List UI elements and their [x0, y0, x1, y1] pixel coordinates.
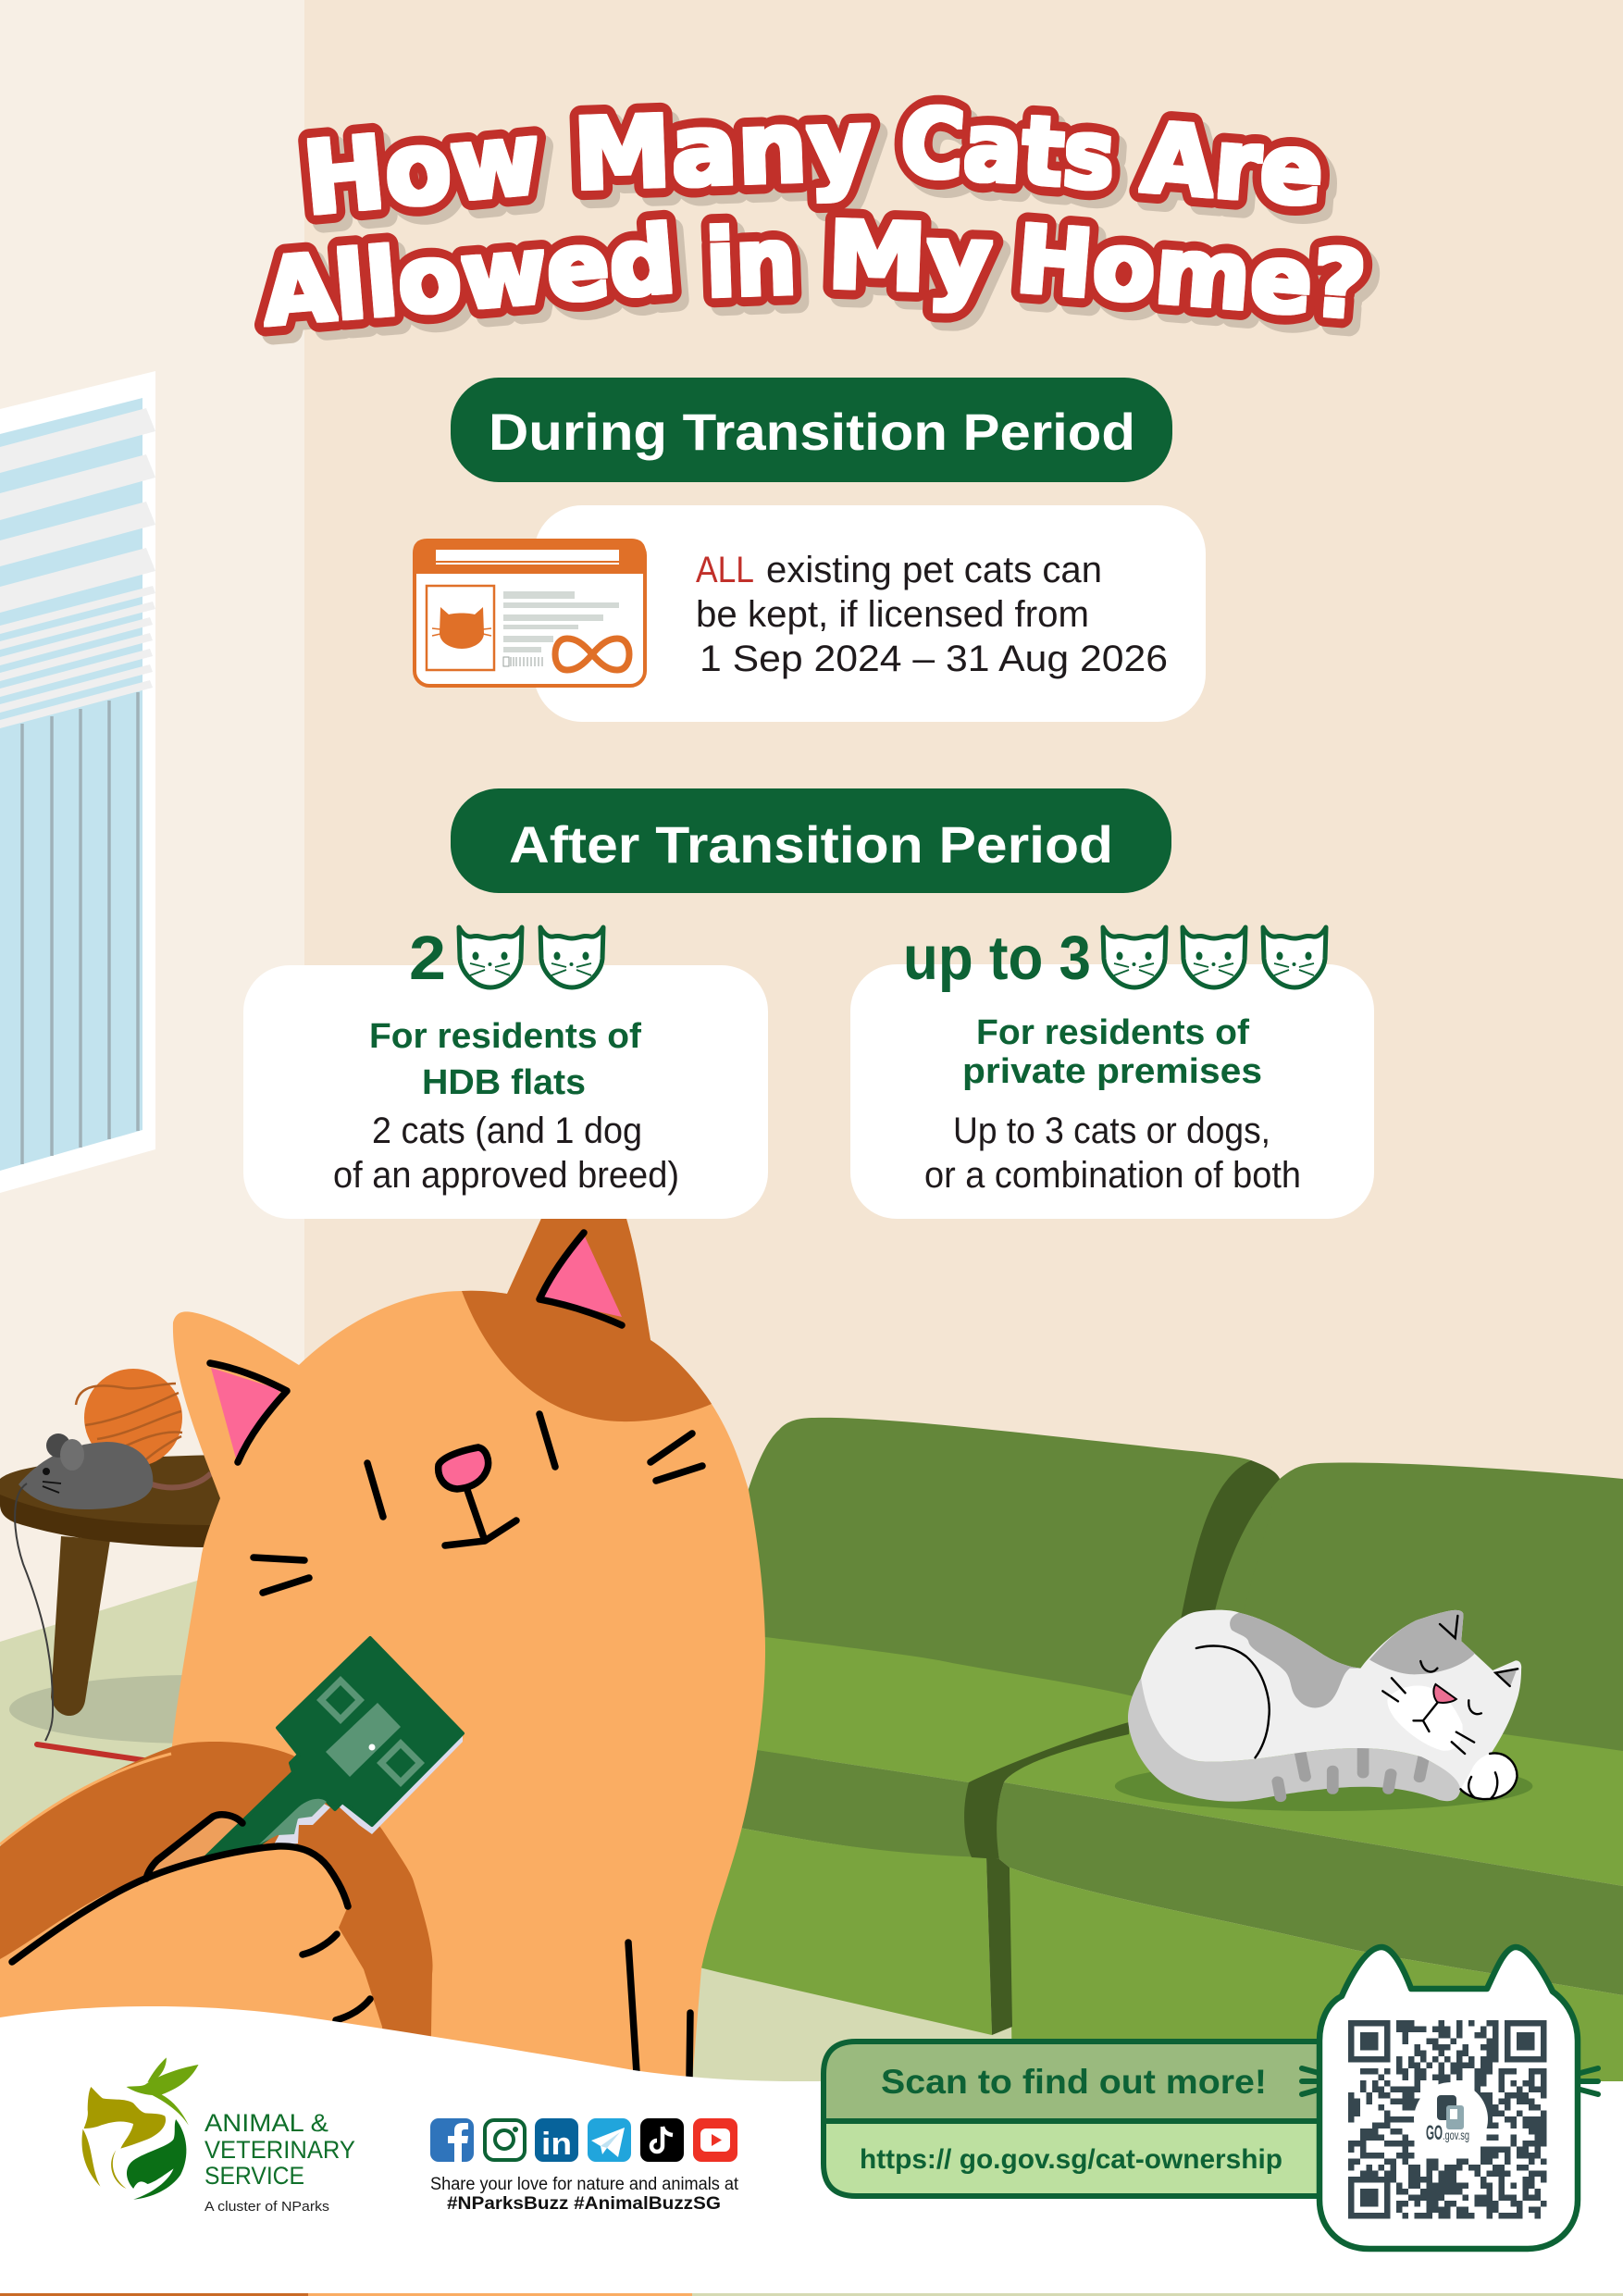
heading pill: during transition period — [451, 378, 1172, 482]
icon: ball of yarn — [76, 1369, 182, 1467]
key held by the cat — [205, 1638, 463, 1857]
title: How — [299, 101, 545, 238]
title: Cats — [897, 87, 1119, 212]
text: private premises allowance: or a combination of both — [924, 1155, 1301, 1196]
text: all existing pet cats: existing pet cats can — [766, 550, 1102, 590]
icon: toy mouse — [19, 1433, 211, 1509]
panel: during transition text box — [534, 505, 1206, 722]
tail and arm back — [0, 1742, 433, 2091]
social media icons — [430, 2118, 737, 2162]
count: 2: 2 — [409, 924, 446, 993]
logo text: SERVICE — [204, 2162, 304, 2190]
QR code in cat-shaped frame — [1302, 1947, 1598, 2249]
GO.gov.sg logo: GO — [1426, 2121, 1443, 2144]
white footer wave — [0, 2006, 1623, 2296]
text: share your love: Share your love for nature and animals at — [430, 2175, 739, 2194]
icon: cat face — [1263, 927, 1326, 987]
cat nose — [439, 1447, 489, 1489]
heading: for residents of private premises — [962, 1013, 1262, 1091]
cat frame — [1319, 1947, 1578, 2249]
heading: for residents of private premises: For residents of — [976, 1013, 1249, 1052]
icon: telegram — [588, 2118, 631, 2162]
title: Allowed — [258, 205, 679, 347]
window with blinds — [0, 371, 155, 1193]
panel: scan to find out more: Scan to find out more! — [881, 2063, 1267, 2101]
title: Are — [1138, 101, 1328, 228]
cat whiskers — [1302, 2068, 1598, 2094]
icon: cat face — [459, 927, 522, 987]
count: up to 3: up to 3 — [903, 924, 1091, 993]
text: all existing pet cats — [696, 550, 1168, 679]
panel: scan to find out more: https:// go.gov.sg/cat-ownership — [860, 2144, 1282, 2175]
heading: for residents of HDB flats — [369, 1017, 641, 1102]
icon: cat face — [1183, 927, 1245, 987]
cat head patch and ear — [462, 1212, 712, 1421]
logo mark — [81, 2057, 199, 2200]
title: My — [825, 201, 994, 315]
title: in — [704, 207, 799, 318]
title: Many — [572, 88, 873, 212]
sleeping white and grey cat — [1115, 1610, 1532, 1811]
cat ear inners — [211, 1235, 622, 1458]
cat body — [148, 1212, 765, 2128]
text: HDB allowance: of an approved breed) — [333, 1155, 679, 1196]
heading pill: after transition period — [451, 788, 1171, 893]
text: HDB allowance — [333, 1111, 679, 1196]
icon: cat face — [540, 927, 603, 987]
paw outlines — [12, 1815, 370, 2020]
logo text: A cluster of NParks — [204, 2199, 329, 2215]
title: Home? — [1012, 205, 1369, 341]
logo text — [204, 2109, 355, 2215]
heading: for residents of HDB flats: For residents of — [369, 1017, 641, 1056]
icon: linkedin: in — [541, 2127, 572, 2162]
icon: linkedin — [535, 2118, 578, 2162]
thumb gap — [146, 1815, 242, 1879]
icon: instagram — [485, 2120, 525, 2160]
title — [258, 87, 1369, 347]
logo: Animal and Veterinary Service — [81, 2057, 355, 2215]
icon: facebook — [430, 2118, 474, 2162]
QR modules — [1348, 2023, 1547, 2215]
panel: private premises — [850, 924, 1374, 1219]
text: HDB allowance: 2 cats (and 1 dog — [372, 1111, 642, 1151]
text: private premises allowance: Up to 3 cats or dogs, — [953, 1111, 1270, 1151]
text: all existing pet cats: be kept, if licensed from — [696, 594, 1089, 635]
icon: tiktok — [640, 2118, 684, 2162]
heading pill: after transition period: After Transition Period — [509, 815, 1113, 874]
side table with toy mouse and yarn — [0, 1369, 379, 1763]
panel: HDB flats — [243, 924, 768, 1219]
green sofa — [648, 1418, 1623, 2091]
text: share your love — [430, 2175, 739, 2214]
icon: cat face — [1103, 927, 1166, 987]
text: share your love: #NParksBuzz #AnimalBuzzSG — [447, 2194, 721, 2214]
text: private premises allowance — [924, 1111, 1301, 1196]
icon: pet licence card — [413, 539, 646, 686]
big orange cat — [0, 1212, 765, 2128]
floor — [0, 1527, 1018, 2091]
cat front arm and paw — [0, 1846, 389, 2091]
GO.gov.sg logo — [1414, 2082, 1488, 2156]
bottom edge strip — [0, 2293, 1623, 2296]
panel: scan to find out more — [824, 2042, 1323, 2196]
heading: for residents of HDB flats: HDB flats — [422, 1063, 586, 1102]
heading: for residents of private premises: private premises — [962, 1052, 1262, 1091]
cat face lines — [210, 1233, 702, 2078]
GO.gov.sg logo: .gov.sg — [1443, 2128, 1469, 2142]
icon: youtube — [693, 2118, 737, 2162]
logo text: ANIMAL & — [204, 2109, 328, 2137]
heading pill: during transition period: During Transition Period — [489, 403, 1135, 461]
text: all existing pet cats: 1 Sep 2024 – 31 Aug 2026 — [700, 639, 1168, 679]
logo text: VETERINARY — [204, 2136, 355, 2164]
text: all existing pet cats: ALL — [696, 550, 754, 590]
